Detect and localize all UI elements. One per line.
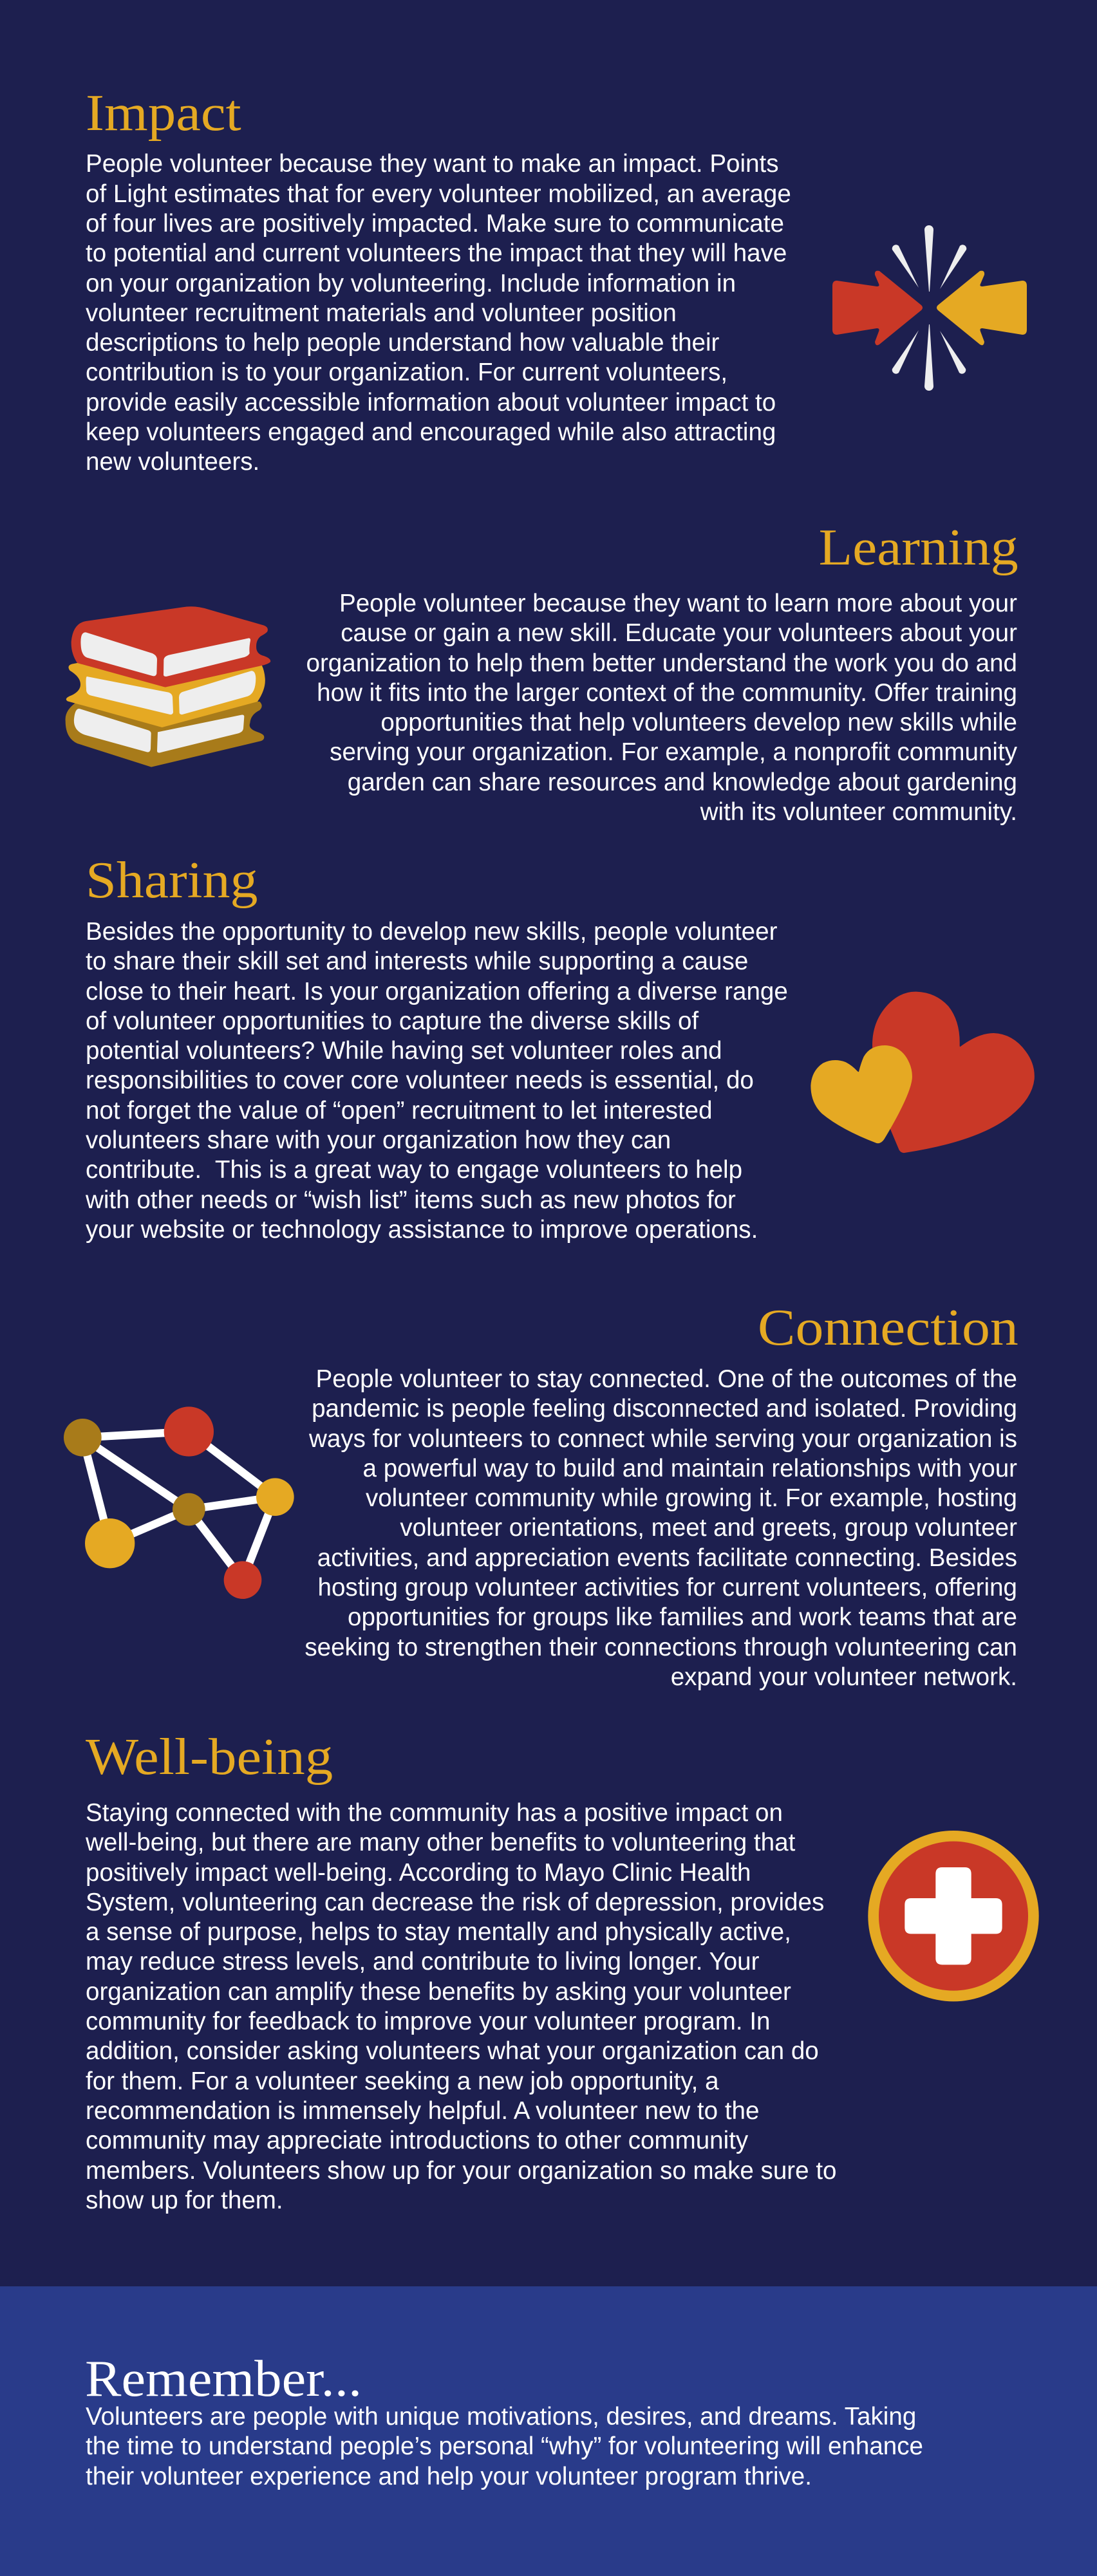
text block: connection body: ways for volunteers to connect while serving your organization is <box>309 1425 1017 1453</box>
text block: sharing body: your website or technology assistance to improve operations. <box>86 1216 758 1244</box>
heading: Sharing: Sharing <box>86 852 258 909</box>
text block: connection body: People volunteer to stay connected. One of the outcomes of the <box>316 1365 1017 1393</box>
text block: connection body: volunteer orientations, meet and greets, group volunteer <box>400 1514 1017 1542</box>
text block: connection body: expand your volunteer network. <box>671 1663 1017 1691</box>
text block: learning body: opportunities that help volunteers develop new skills while <box>380 709 1017 736</box>
text block: sharing body: of volunteer opportunities to capture the diverse skills of <box>86 1007 699 1035</box>
text block: connection body: hosting group volunteer activities for current volunteers, offering <box>318 1574 1017 1601</box>
text block: learning body: People volunteer because they want to learn more about your <box>339 590 1017 617</box>
text block: impact body: provide easily accessible information about volunteer impact to <box>86 389 776 416</box>
text block: connection body: volunteer community while growing it. For example, hosting <box>366 1484 1017 1512</box>
heading: Learning: Learning <box>819 519 1018 576</box>
icon: network of nodes <box>64 1406 294 1599</box>
text block: well-being body: may reduce stress levels, and contribute to living longer. Your <box>86 1948 760 1975</box>
text block: well-being body: organization can amplify these benefits by asking your volunteer <box>86 1978 791 2006</box>
text block: connection body <box>305 1365 1017 1691</box>
text block: learning body: organization to help them better understand the work you do and <box>306 649 1017 677</box>
text block: learning body <box>306 590 1017 826</box>
text block: learning body: how it fits into the larger context of the community. Offer training <box>317 679 1017 707</box>
heading: Remember: Remember... <box>85 2351 362 2407</box>
text block: impact body: volunteer recruitment materials and volunteer position <box>86 299 677 327</box>
text block: sharing body: close to their heart. Is your organization offering a diverse range <box>86 978 788 1005</box>
text block: sharing body: not forget the value of “open” recruitment to let interested <box>86 1097 713 1125</box>
text block: well-being body: Staying connected with the community has a positive impact on <box>86 1799 783 1827</box>
text block: impact body: of Light estimates that for every volunteer mobilized, an average <box>86 180 791 208</box>
text block: sharing body: contribute. This is a great way to engage volunteers to help <box>86 1156 742 1184</box>
text block: connection body: seeking to strengthen their connections through volunteering can <box>305 1634 1017 1661</box>
text block: sharing body: potential volunteers? While having set volunteer roles and <box>86 1037 722 1065</box>
text block: connection body: a powerful way to build and maintain relationships with your <box>363 1455 1017 1482</box>
text block: well-being body: members. Volunteers show up for your organization so make sure to <box>86 2157 837 2185</box>
text block: sharing body: responsibilities to cover core volunteer needs is essential, do <box>86 1067 754 1094</box>
text block: sharing body: to share their skill set and interests while supporting a cause <box>86 947 748 975</box>
text block: sharing body <box>86 918 788 1244</box>
text block: sharing body: volunteers share with your organization how they can <box>86 1126 671 1154</box>
text block: well-being body: recommendation is immensely helpful. A volunteer new to the <box>86 2097 759 2125</box>
panel: sharing <box>86 852 1035 1244</box>
panel: impact <box>86 85 1027 476</box>
panel: well-being <box>86 1729 1039 2214</box>
text block: remember body <box>86 2403 923 2490</box>
icon: two hearts <box>811 991 1035 1153</box>
text block: well-being body: addition, consider asking volunteers what your organization can do <box>86 2037 819 2065</box>
heading: Connection: Connection <box>758 1300 1018 1356</box>
heading: Well-being: Well-being <box>86 1729 333 1786</box>
text block: remember body: the time to understand people’s personal “why” for volunteering will enhance <box>86 2432 923 2460</box>
text block: well-being body: community may appreciate introductions to other community <box>86 2127 748 2154</box>
text block: well-being body: for them. For a volunteer seeking a new job opportunity, a <box>86 2067 719 2095</box>
text block: connection body: pandemic is people feeling disconnected and isolated. Providing <box>312 1395 1017 1423</box>
panel: learning <box>66 519 1018 826</box>
text block: remember body: their volunteer experience and help your volunteer program thrive. <box>86 2463 812 2490</box>
text block: well-being body: a sense of purpose, helps to stay mentally and physically active, <box>86 1918 791 1946</box>
text block: well-being body: System, volunteering can decrease the risk of depression, provides <box>86 1889 824 1916</box>
text block: connection body: opportunities for groups like families and work teams that are <box>348 1603 1017 1631</box>
panel: remember <box>0 2286 1097 2576</box>
text block: remember body: Volunteers are people with unique motivations, desires, and dreams. Taking <box>86 2403 916 2431</box>
text block: impact body: contribution is to your organization. For current volunteers, <box>86 359 727 386</box>
text block: learning body: serving your organization. For example, a nonprofit community <box>330 738 1017 766</box>
text block: well-being body: positively impact well-being. According to Mayo Clinic Health <box>86 1859 751 1887</box>
text block: learning body: garden can share resources and knowledge about gardening <box>348 769 1017 796</box>
icon: stack of books <box>66 606 270 767</box>
icon: medical cross badge <box>868 1831 1039 2002</box>
icon: converging arrows with burst <box>832 225 1027 391</box>
text block: sharing body: Besides the opportunity to develop new skills, people volunteer <box>86 918 777 946</box>
heading: Impact: Impact <box>86 85 241 142</box>
text block: impact body: keep volunteers engaged and encouraged while also attracting <box>86 418 776 446</box>
text block: learning body: cause or gain a new skill. Educate your volunteers about your <box>341 619 1017 647</box>
text block: well-being body <box>86 1799 837 2214</box>
text block: impact body: on your organization by volunteering. Include information in <box>86 270 736 297</box>
text block: impact body <box>86 150 791 476</box>
text block: impact body: descriptions to help people understand how valuable their <box>86 329 719 357</box>
text block: learning body: with its volunteer community. <box>700 798 1017 826</box>
text block: sharing body: with other needs or “wish list” items such as new photos for <box>86 1186 736 1214</box>
text block: well-being body: show up for them. <box>86 2187 283 2214</box>
text block: impact body: of four lives are positively impacted. Make sure to communicate <box>86 210 784 238</box>
panel: connection <box>64 1300 1018 1691</box>
text block: impact body: new volunteers. <box>86 448 259 476</box>
text block: well-being body: well-being, but there are many other benefits to volunteering that <box>86 1829 795 1856</box>
text block: impact body: to potential and current volunteers the impact that they will have <box>86 239 787 267</box>
text block: well-being body: community for feedback to improve your volunteer program. In <box>86 2008 771 2035</box>
text block: impact body: People volunteer because they want to make an impact. Points <box>86 150 779 178</box>
text block: connection body: activities, and appreciation events facilitate connecting. Besides <box>317 1544 1017 1572</box>
